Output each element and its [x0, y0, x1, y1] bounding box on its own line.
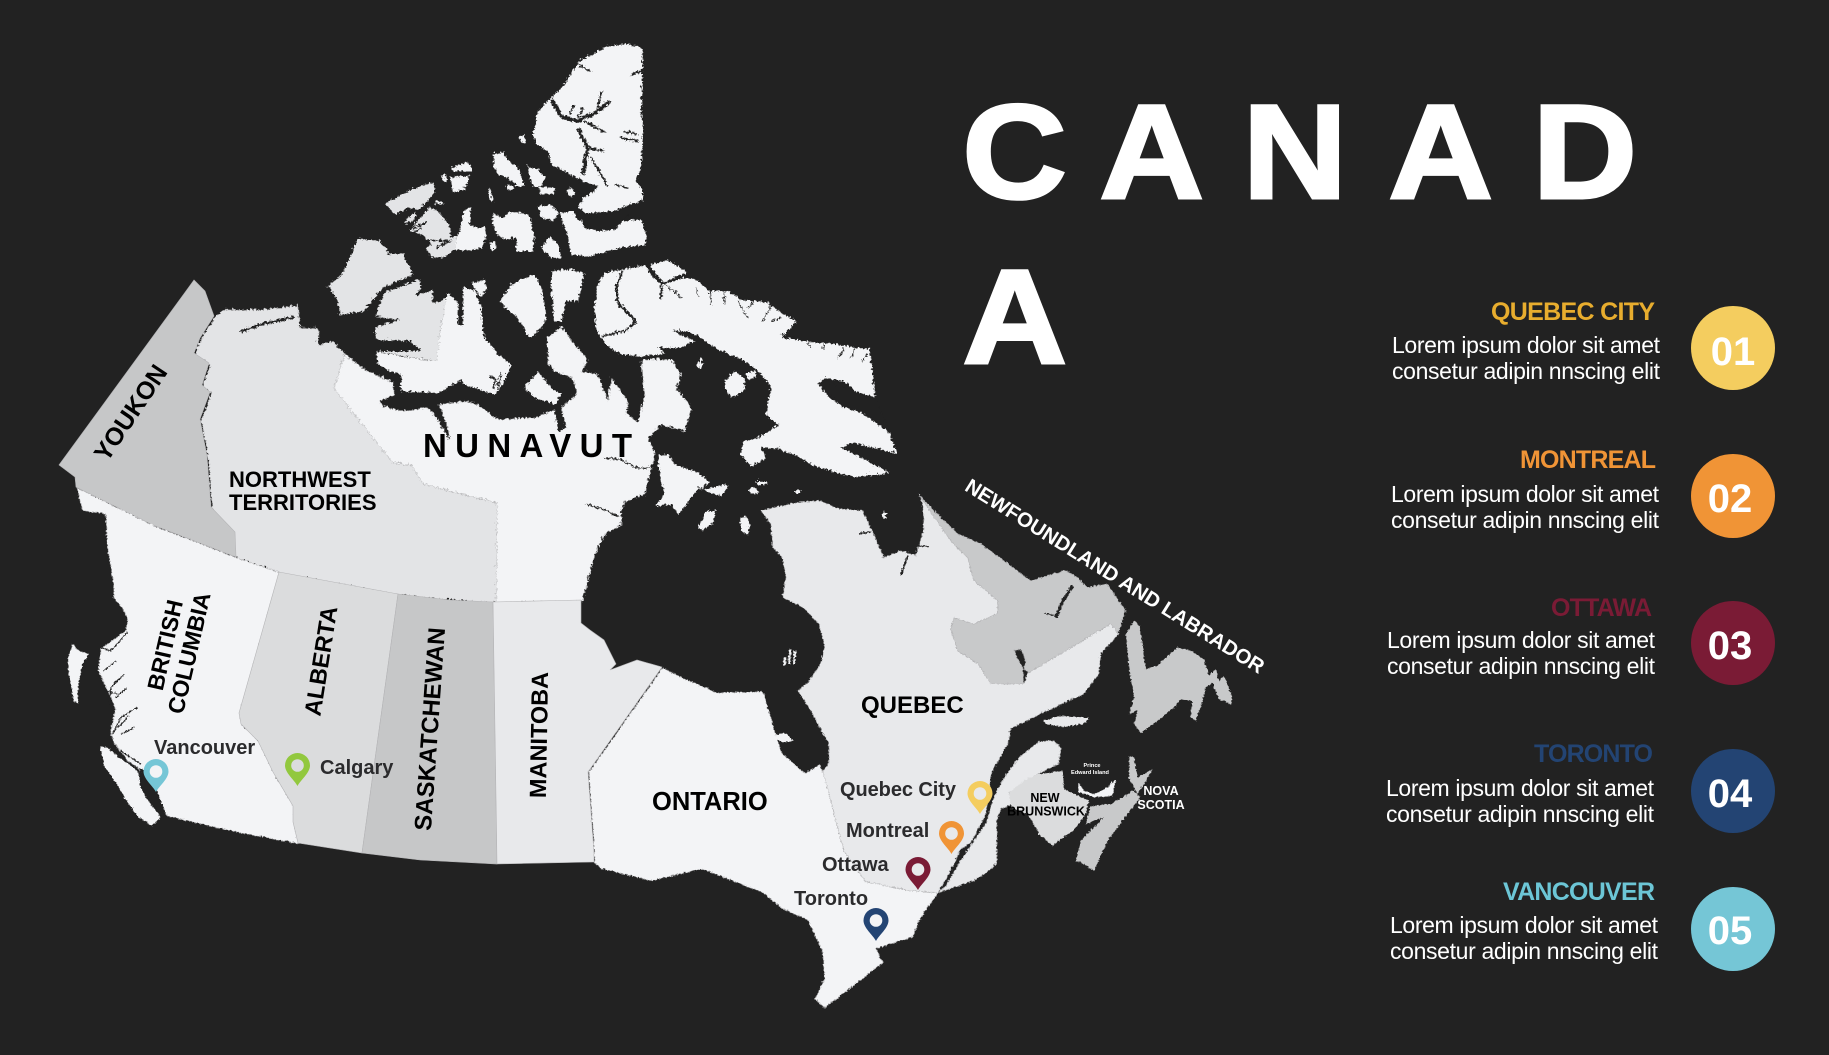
- city label: Quebec City: Quebec City: [840, 779, 957, 801]
- region: Nunavut mainland: [333, 325, 690, 602]
- legend item 05: Vancouver: VANCOUVER: [1503, 878, 1655, 906]
- region: Northwest Territories mainland: [194, 305, 496, 602]
- city label: Calgary: Calgary: [320, 757, 394, 779]
- region: Nova Scotia: [1075, 790, 1140, 870]
- legend item 05: Vancouver: 05: [1708, 909, 1752, 953]
- label: Prince Edward Island: [1071, 763, 1110, 776]
- label: Alberta: ALBERTA: [300, 604, 342, 718]
- label: Northwest Territories: NORTHWEST: [229, 467, 371, 492]
- Atlantic provinces: [1008, 620, 1232, 870]
- legend item 03: Ottawa: [1387, 594, 1775, 685]
- legend item 02: Montreal: consetur adipin nnscing elit: [1391, 507, 1660, 533]
- label: Prince Edward Island: Prince: [1083, 763, 1101, 769]
- legend item 05: Vancouver: consetur adipin nnscing elit: [1390, 938, 1659, 964]
- legend item 01: Quebec City: 01: [1711, 330, 1755, 374]
- title: A: [962, 242, 1067, 392]
- Nunavut inlets: [435, 408, 648, 515]
- lower Arctic islands: [470, 268, 583, 403]
- label: British Columbia: COLUMBIA: [162, 590, 216, 716]
- label: New Brunswick: BRUNSWICK: [1007, 804, 1085, 818]
- Haida Gwaii: [67, 643, 88, 703]
- legend item 01: Quebec City: consetur adipin nnscing elit: [1392, 358, 1661, 384]
- legend item 02: Montreal: 02: [1708, 477, 1752, 521]
- label: Youkon: YOUKON: [89, 360, 173, 466]
- legend item 03: Ottawa: Lorem ipsum dolor sit amet: [1387, 627, 1656, 653]
- label: Ontario: ONTARIO: [652, 788, 768, 816]
- label: Northwest Territories: [229, 467, 377, 515]
- Ellesmere Island: [532, 43, 642, 212]
- region: Newfoundland: [1125, 620, 1232, 733]
- city label: Vancouver: Vancouver: [154, 737, 255, 759]
- James Bay and Hudson Bay small islands: [770, 648, 796, 742]
- pin: Toronto: [864, 908, 888, 941]
- pin: Quebec City: [968, 781, 992, 814]
- legend item 04: Toronto: TORONTO: [1534, 740, 1653, 768]
- label: Nova Scotia: NOVA: [1143, 784, 1179, 798]
- legend item 03: Ottawa: 03: [1708, 624, 1752, 668]
- Victoria Island, Nunavut part: [375, 287, 510, 393]
- Vancouver Island: [99, 746, 160, 825]
- legend item 03: Ottawa: consetur adipin nnscing elit: [1387, 653, 1656, 679]
- Ellesmere fjords: [550, 98, 608, 173]
- pin: Vancouver: [144, 759, 168, 792]
- map of Canada: [59, 43, 1268, 1007]
- pin: Montreal: [939, 821, 964, 854]
- legend item 04: Toronto: 04: [1708, 772, 1753, 816]
- label: New Brunswick: [1007, 791, 1085, 818]
- title: [962, 77, 1637, 392]
- region: Alberta: [239, 572, 398, 853]
- legend item 04: Toronto: Lorem ipsum dolor sit amet: [1386, 775, 1655, 801]
- pin: Ottawa: [906, 857, 930, 890]
- label: Manitoba: MANITOBA: [525, 672, 553, 798]
- label: Northwest Territories: TERRITORIES: [229, 490, 377, 515]
- legend item 05: Vancouver: Lorem ipsum dolor sit amet: [1390, 912, 1659, 938]
- region: Quebec: [760, 494, 1118, 892]
- legend item 02: Montreal: MONTREAL: [1520, 446, 1656, 474]
- Queen Elizabeth Islands: [385, 43, 645, 257]
- region: New Brunswick: [1008, 770, 1088, 845]
- city label: Montreal: Montreal: [846, 820, 929, 842]
- Anticosti Island: [1043, 715, 1088, 726]
- legend list: [1386, 298, 1775, 971]
- label: Quebec: QUEBEC: [861, 692, 964, 719]
- Bylot Island: [648, 258, 687, 282]
- region: Ontario: [588, 667, 937, 1007]
- legend item 01: Quebec City: [1392, 298, 1775, 390]
- legend item 04: Toronto: [1386, 740, 1775, 833]
- legend item 05: Vancouver: [1390, 878, 1775, 971]
- region: Manitoba: [493, 600, 662, 864]
- city labels: [154, 737, 957, 910]
- label: Nova Scotia: SCOTIA: [1137, 798, 1185, 812]
- label: Newfoundland and Labrador: NEWFOUNDLAND AND LABRADOR: [961, 475, 1268, 679]
- region: Labrador: [918, 494, 1125, 683]
- Banks Island: [327, 237, 412, 313]
- label: British Columbia: BRITISH: [142, 597, 188, 693]
- region: Saskatchewan: [362, 594, 497, 864]
- small Arctic islands: [433, 133, 574, 257]
- legend item 04: Toronto: consetur adipin nnscing elit: [1386, 801, 1655, 827]
- title: CANAD: [962, 77, 1637, 227]
- Baffin fjords: [602, 262, 687, 335]
- Strait of Georgia: [138, 767, 165, 815]
- Hudson Bay inlets in Quebec: [858, 531, 928, 575]
- Baffin Island: [593, 258, 896, 476]
- city label: Toronto: Toronto: [794, 888, 868, 910]
- label: New Brunswick: NEW: [1030, 791, 1060, 805]
- Cape Breton: [1128, 755, 1152, 793]
- city label: Ottawa: Ottawa: [822, 854, 890, 876]
- Smallwood Reservoir: [1055, 585, 1072, 617]
- Arctic region: Northwest Territories, Nunavut and islands: [194, 43, 896, 602]
- Foxe Basin and Hudson Strait islands: [655, 355, 886, 533]
- Prince Patrick and Melville west islands: [385, 182, 455, 257]
- region: Yukon: [59, 280, 236, 557]
- BC coastal fjords: [100, 632, 140, 763]
- region: Prince Edward Island: [1077, 779, 1115, 797]
- label: Saskatchewan: SASKATCHEWAN: [410, 627, 451, 832]
- legend item 03: Ottawa: OTTAWA: [1551, 594, 1652, 622]
- legend item 01: Quebec City: QUEBEC CITY: [1491, 298, 1655, 326]
- pin: Calgary: [285, 753, 310, 786]
- label: Nunavut: NUNAVUT: [423, 427, 632, 464]
- legend item 02: Montreal: [1391, 446, 1775, 538]
- Devon Island: [558, 210, 645, 255]
- legend item 01: Quebec City: Lorem ipsum dolor sit amet: [1392, 332, 1661, 358]
- province labels: [89, 360, 1085, 832]
- region: British Columbia: [67, 487, 298, 843]
- Victoria Island, Northwest Territories part: [373, 278, 444, 360]
- label: Prince Edward Island: Edward Island: [1071, 770, 1110, 776]
- legend item 02: Montreal: Lorem ipsum dolor sit amet: [1391, 481, 1660, 507]
- label: Nova Scotia: [1137, 784, 1185, 812]
